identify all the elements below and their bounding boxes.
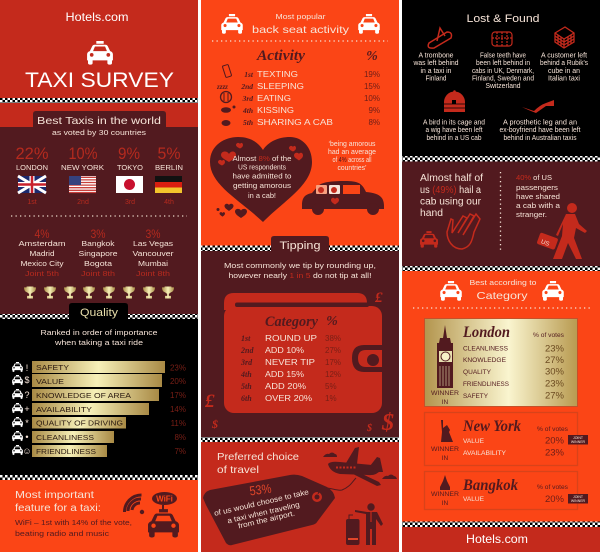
activity table: 1st	[244, 70, 254, 79]
icon: bird cage	[444, 90, 465, 112]
ranks: 2nd	[77, 199, 89, 206]
heading: of travel	[217, 464, 259, 476]
icons: activities	[216, 64, 236, 126]
footer	[402, 522, 600, 552]
currency symbols: $	[381, 410, 394, 436]
tipping table: 38%	[325, 334, 341, 343]
icon: taxi right	[542, 281, 564, 301]
tipping table: ADD 10%	[265, 345, 304, 355]
text: trombone: was left behind	[413, 60, 459, 67]
quote: ‘being amorous	[328, 141, 376, 148]
card: London: IN	[442, 399, 449, 406]
activity table: SLEEPING	[257, 81, 304, 91]
text: prosthetic leg: A prosthetic leg and an	[503, 120, 577, 126]
joint 8th: Las Vegas group	[132, 227, 174, 278]
heading: back seat activity	[252, 24, 350, 36]
panel: preferred choice of travel	[201, 437, 399, 552]
text: false teeth: Switzerland	[486, 83, 521, 90]
heart with text: getting amorous	[233, 181, 291, 190]
wallet	[224, 293, 382, 413]
tipping table: 2nd	[240, 346, 254, 355]
text: trombone: in a taxi in	[420, 68, 452, 75]
heading: Quality	[80, 307, 119, 319]
card: Bangkok: Bangkok	[462, 477, 518, 494]
body text: beating radio and music	[15, 529, 109, 538]
card: London: QUALITY	[463, 369, 492, 376]
card: New York: IN	[442, 455, 449, 462]
title: TAXI SURVEY	[25, 69, 174, 92]
activity table: Activity	[256, 48, 305, 64]
text: trombone: A trombone	[418, 52, 454, 60]
card: Bangkok	[424, 472, 588, 510]
text: hailing: hand	[420, 208, 443, 219]
card: New York: % of votes	[537, 427, 568, 433]
text: Rubik's cube: A customer left	[541, 52, 587, 60]
text: false teeth: been left behind in	[476, 60, 530, 67]
activity table: EATING	[257, 93, 291, 103]
heading: Best according to	[470, 278, 536, 287]
joint 8th: Bangkok group: 3%	[90, 227, 106, 241]
joint 5th: Mexico City	[20, 259, 64, 268]
bar chart: AVAILABILITY	[36, 405, 92, 414]
tipping table: OVER 20%	[265, 393, 312, 403]
joint 8th: Bangkok group	[78, 227, 118, 278]
panel: back seat activity	[201, 0, 600, 552]
ranks: 3rd	[125, 199, 135, 206]
text: false teeth: cabs in UK, Denmark,	[472, 68, 534, 75]
badge: joint winner: WINNER	[571, 440, 586, 444]
intro	[224, 261, 376, 280]
activity table: KISSING	[257, 105, 294, 115]
card: Bangkok: 20%	[545, 494, 565, 505]
card: London: London	[462, 324, 510, 341]
top four percentages: 9%	[118, 144, 140, 163]
badge: joint winner: JOINT	[573, 436, 584, 440]
bar chart: ☺	[22, 446, 32, 456]
top four percentages: 5%	[158, 144, 180, 163]
subheading: as voted by 30 countries	[52, 130, 147, 137]
tipping table: Category	[265, 314, 318, 330]
text: shared cab	[516, 173, 561, 219]
text: shared cab: have shared	[516, 192, 560, 201]
badge: joint winner: JOINT	[573, 495, 584, 499]
text: bird in cage	[423, 120, 485, 142]
card: New York: 20%	[545, 436, 565, 446]
bar chart: *	[25, 418, 29, 428]
icon: taxi left	[221, 14, 243, 34]
heading	[217, 451, 299, 476]
bar chart	[12, 361, 186, 457]
tipping table: %	[326, 314, 338, 329]
activity table: TEXTING	[257, 69, 298, 79]
flag: UK	[18, 176, 46, 193]
joint 5th: 4%	[34, 227, 50, 241]
badge: joint winner	[568, 435, 588, 444]
icon: trombone	[428, 28, 452, 48]
text: hailing: us (49%) hail a	[420, 185, 481, 196]
icon: wifi bubble and taxi	[148, 492, 179, 537]
heading	[470, 278, 536, 302]
quote: countries’	[338, 165, 367, 172]
icon: taxi	[87, 41, 113, 65]
bar chart: !	[26, 363, 28, 373]
tipping table: 17%	[325, 358, 341, 367]
icon: walking person with bag: US	[540, 239, 550, 248]
logo: Hotels.com: Hotels.com	[466, 532, 528, 546]
bar chart: 11%	[171, 419, 186, 428]
badge: joint winner: WINNER	[571, 499, 586, 503]
tipping table: 1%	[325, 394, 337, 403]
card: London: CLEANLINESS	[463, 346, 509, 352]
top four cities	[16, 165, 183, 172]
text: prosthetic leg: ex-boyfriend have been left	[500, 127, 581, 134]
card: New York	[424, 412, 588, 466]
icon: Rubik's cube	[555, 27, 574, 48]
tipping table: ROUND UP	[265, 333, 317, 343]
heading	[252, 12, 350, 36]
bar chart: KNOWLEDGE OF AREA	[36, 391, 131, 400]
icon: wifi signal	[124, 495, 144, 514]
quote	[328, 141, 376, 172]
heading	[15, 489, 101, 514]
luggage tag: 53%	[248, 481, 273, 499]
currency symbols: $	[366, 423, 372, 434]
intro: Most commonly we tip by rounding up,	[224, 261, 376, 270]
heart with text: have admitted to	[232, 172, 292, 180]
icon: prosthetic leg	[522, 100, 554, 113]
bar chart: 23%	[170, 364, 186, 372]
card: New York: VALUE	[463, 438, 485, 445]
tipping table: 1st	[241, 334, 251, 343]
luggage tag: from the airport.	[237, 509, 296, 530]
text: Rubik's cube: behind a Rubik's	[540, 60, 588, 67]
joint 8th: Las Vegas group: Vancouver	[132, 249, 174, 258]
joint 8th: Las Vegas group: Joint 8th	[136, 269, 170, 278]
intro text: Ranked in order of importance	[40, 328, 158, 337]
bar chart: 17%	[170, 391, 186, 400]
card: London: 27%	[545, 390, 565, 402]
text: prosthetic leg	[500, 120, 581, 142]
currency symbols: $	[211, 417, 218, 431]
heading: Best Taxis in the world	[37, 115, 161, 127]
text: false teeth: False teeth have	[480, 52, 526, 60]
tipping table: 5%	[325, 382, 337, 391]
text: bird in cage: a wig have been left	[426, 127, 483, 134]
text: shared cab: stranger.	[516, 210, 547, 219]
heart with text: US respondents	[238, 162, 286, 172]
intro: however nearly 1 in 5 do not tip at all!	[228, 271, 372, 280]
card: London: KNOWLEDGE	[463, 357, 507, 364]
activity table: 10%	[364, 94, 380, 103]
luggage tag: of us would choose to take	[213, 487, 310, 518]
text: shared cab: 40% of US	[516, 173, 552, 182]
top four percentages: 22%	[16, 144, 48, 163]
heart with text	[210, 137, 312, 222]
tipping table: NEVER TIP	[265, 357, 315, 367]
card: London: 27%	[545, 355, 565, 366]
text: trombone: Finland	[426, 76, 447, 82]
bar chart: •	[25, 432, 29, 442]
tipping table: 4th	[240, 370, 252, 379]
text: prosthetic leg: behind in Australian taxis	[504, 135, 577, 142]
joint 8th: Las Vegas group: Mumbai	[138, 259, 168, 268]
icon: Big Ben	[437, 325, 453, 388]
top four cities: TOKYO	[117, 165, 144, 172]
tipping table	[240, 314, 341, 403]
top four percentages: 10%	[68, 144, 98, 163]
trophies	[24, 286, 174, 298]
text: hailing	[420, 173, 483, 219]
joint 5th: Joint 5th	[25, 269, 59, 278]
currency symbols: £	[204, 391, 215, 412]
bar chart: +	[24, 404, 30, 414]
icon: taxi right	[358, 14, 380, 34]
tipping table: ADD 15%	[265, 369, 304, 379]
top four cities: NEW YORK	[61, 165, 104, 172]
joint 8th: Las Vegas group: Las Vegas	[133, 239, 173, 248]
panel: best taxis in the world	[0, 111, 198, 315]
intro text	[40, 328, 158, 347]
bar chart: 7%	[174, 447, 186, 456]
luggage tag	[203, 475, 356, 545]
panel: header	[0, 0, 198, 128]
card: New York: 23%	[545, 448, 565, 458]
card: London: WINNER	[431, 390, 459, 397]
joint 8th: Bangkok group: Joint 8th	[81, 269, 115, 278]
joint 8th: Las Vegas group: 3%	[146, 227, 161, 241]
tipping table: 27%	[325, 346, 341, 355]
card: London: SAFETY	[463, 393, 489, 400]
text: Rubik's cube: Italian taxi	[548, 76, 580, 82]
card: New York: WINNER	[431, 446, 459, 453]
currency symbols	[204, 290, 394, 436]
ranks: 4th	[164, 199, 174, 206]
panel: best according to category	[402, 271, 600, 522]
card: Bangkok: VALUE	[463, 496, 485, 503]
small hearts	[216, 204, 247, 218]
text: hailing: cab using our	[420, 196, 482, 208]
bar chart: CLEANLINESS	[36, 433, 94, 442]
bar chart: FRIENDLINESS	[36, 447, 96, 456]
activity table: 5th	[243, 118, 253, 127]
heading: feature for a taxi:	[15, 502, 101, 514]
activity table: 3rd	[242, 94, 253, 103]
card: New York: AVAILABILITY	[463, 450, 507, 457]
icon: taxi	[420, 231, 438, 248]
panel: most important feature	[0, 480, 198, 552]
top four cities: LONDON	[16, 165, 48, 172]
icon: man with suitcase	[346, 503, 383, 545]
card: Bangkok: % of votes	[537, 485, 568, 491]
bar chart: ?	[24, 390, 30, 400]
flag: Germany	[155, 176, 182, 193]
text: hailing: Almost half of	[420, 173, 483, 184]
flag: USA	[69, 176, 96, 193]
icon: airplane and clouds	[323, 447, 397, 486]
icon: taxi left	[440, 281, 462, 301]
activity table: 15%	[364, 82, 380, 91]
text: false teeth: Finland, Sweden and	[472, 76, 534, 82]
heart with text: in a cab!	[248, 191, 276, 200]
heading: Category	[476, 290, 528, 302]
text: bird in cage: behind in a US cab	[426, 135, 482, 142]
logo: Hotels.com: Hotels.com	[66, 10, 128, 24]
activity table: %	[366, 49, 378, 64]
icons: activities: zzzz	[216, 83, 228, 91]
card: New York: New York	[462, 418, 521, 435]
card: Bangkok: IN	[442, 500, 449, 507]
heading: Most important	[15, 489, 94, 501]
text: trombone	[413, 52, 459, 82]
activity table	[216, 48, 380, 127]
joint 8th: Bangkok group: Bogota	[84, 259, 113, 268]
icon: walking person with bag	[536, 203, 587, 259]
tipping table: 6th	[241, 394, 252, 403]
activity table: 2nd	[240, 82, 253, 91]
activity table: 8%	[368, 118, 380, 127]
bar chart: VALUE	[36, 377, 64, 386]
panel: lost and found	[402, 0, 600, 157]
badge: joint winner	[568, 494, 588, 504]
joint 5th	[18, 227, 66, 278]
card: London: FRIENDLINESS	[463, 381, 510, 388]
icon: wifi bubble and taxi: WiFi	[156, 494, 173, 504]
card: London: % of votes	[533, 333, 564, 339]
icon: black cab with couple	[302, 181, 384, 215]
bar chart: QUALITY OF DRIVING	[36, 418, 123, 428]
heart with text: Almost 8% of the	[232, 154, 291, 163]
top four cities: BERLIN	[155, 165, 183, 172]
activity table: SHARING A CAB	[257, 117, 333, 127]
icon: false teeth	[492, 32, 512, 46]
panel: quality	[0, 303, 198, 480]
currency symbols: £	[374, 290, 383, 306]
icon: hand	[447, 214, 480, 249]
text: bird in cage: A bird in its cage and	[423, 120, 485, 126]
card: Bangkok: WINNER	[431, 491, 459, 498]
tipping table: 12%	[325, 370, 341, 379]
tipping table: ADD 20%	[265, 381, 306, 391]
text: shared cab: passengers	[516, 183, 558, 192]
text: shared cab: a cab with a	[516, 201, 561, 210]
heading: Most popular	[276, 12, 326, 21]
bar chart: 8%	[174, 433, 186, 442]
card: London: 23%	[545, 344, 565, 354]
text: Rubik's cube	[540, 52, 588, 82]
heading: Preferred choice	[217, 451, 299, 463]
luggage tag: a taxi when traveling	[226, 500, 301, 525]
activity table: 9%	[368, 106, 380, 115]
activity table: 19%	[364, 70, 380, 79]
joint 5th: Amsterdam	[18, 239, 66, 248]
heading: Tipping	[280, 240, 320, 252]
icon: Statue of Liberty	[441, 420, 453, 442]
heading: Lost & Found	[466, 13, 540, 25]
icon: temple	[440, 475, 450, 490]
quote: of 4% across all	[332, 157, 372, 164]
card: London	[424, 318, 578, 406]
intro text: when taking a taxi ride	[54, 338, 143, 347]
activity table: 4th	[242, 106, 253, 115]
joint 8th: Bangkok group: Singapore	[78, 249, 118, 258]
ranks: 1st	[27, 199, 37, 206]
flag: Japan	[116, 176, 143, 193]
tipping table: 5th	[241, 382, 252, 391]
tipping table: 3rd	[240, 358, 253, 367]
joint 5th: Madrid	[30, 249, 54, 258]
bar chart: $	[24, 375, 30, 385]
card: London: 23%	[545, 378, 565, 390]
panel: tipping	[201, 236, 399, 440]
joint 8th: Bangkok group: Bangkok	[82, 239, 115, 248]
card: London: 30%	[545, 366, 565, 378]
bar chart: SAFETY	[36, 363, 69, 372]
text: Rubik's cube: cube in an	[548, 68, 580, 75]
body text	[15, 518, 132, 538]
text: false teeth	[472, 52, 534, 90]
bar chart: 20%	[170, 377, 186, 386]
top four percentages	[16, 144, 180, 163]
ranks	[27, 199, 174, 206]
body text: WiFi – 1st with 14% of the vote,	[15, 518, 132, 527]
quote: had an average	[328, 149, 376, 156]
panel: hailing and sharing	[402, 156, 600, 272]
bar chart: 14%	[170, 405, 186, 414]
